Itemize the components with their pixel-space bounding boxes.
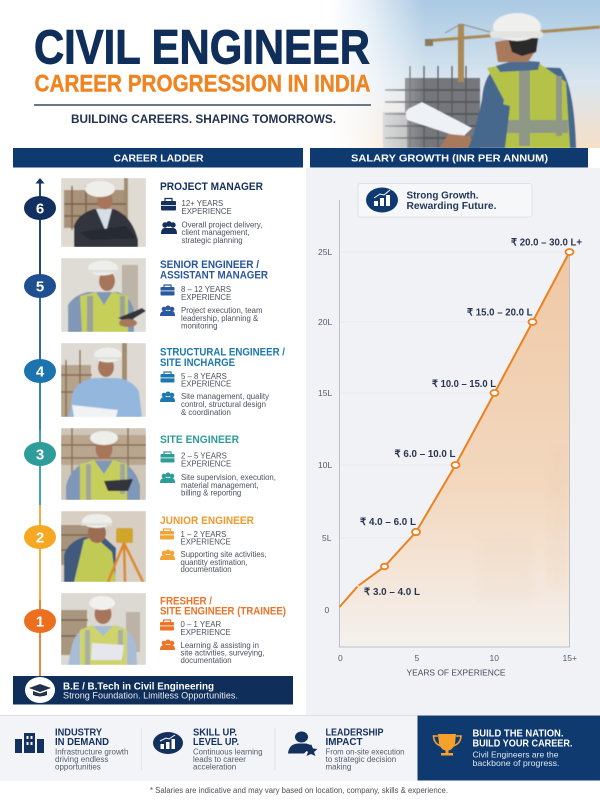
role: structural engineer: STRUCTURAL ENGINEER / xyxy=(160,346,285,358)
benefit: leadership impact: LEADERSHIP xyxy=(326,726,384,738)
role: structural engineer: control, structural design xyxy=(181,400,266,409)
role: project manager: strategic planning xyxy=(182,236,243,245)
heading: career ladder xyxy=(13,148,303,168)
subtitle: CAREER PROGRESSION IN INDIA xyxy=(34,70,370,98)
role: fresher: Learning & assisting in xyxy=(180,641,259,650)
icon: briefcase xyxy=(160,620,174,630)
timeline arrow xyxy=(36,178,44,676)
role: project manager: client management, xyxy=(182,228,250,237)
x axis labels: 5 xyxy=(414,653,420,663)
photo: senior engineer xyxy=(61,258,146,332)
callout: build the nation: backbone of progress. xyxy=(472,758,560,768)
salary labels: ₹ 20.0 – 30.0 L+ xyxy=(511,238,582,248)
step 6 marker: 6 xyxy=(36,200,44,218)
icon: leader with star xyxy=(288,732,318,756)
title: CIVIL ENGINEER xyxy=(34,22,370,74)
heading: salary growth: SALARY GROWTH (INR PER ANNUM) xyxy=(351,152,548,164)
icon: briefcase xyxy=(160,285,174,296)
salary labels: ₹ 3.0 – 4.0 L xyxy=(364,587,420,598)
benefit: leadership impact: to strategic decision xyxy=(326,755,396,764)
benefit: skill up xyxy=(153,726,262,772)
icon: briefcase xyxy=(160,372,174,382)
photo: project manager xyxy=(61,178,146,247)
step 2 marker: 2 xyxy=(36,530,44,546)
callout: build the nation: Civil Engineers are the xyxy=(472,750,559,760)
y axis labels: 5L xyxy=(322,533,332,543)
y axis labels: 0 xyxy=(324,605,330,615)
salary labels xyxy=(360,238,582,598)
x axis labels xyxy=(338,653,577,663)
benefit: skill up: SKILL UP. xyxy=(193,726,237,738)
icon: growth chart xyxy=(366,188,398,212)
heading: salary growth xyxy=(310,148,588,168)
role: fresher: 0 – 1 YEAR xyxy=(180,620,221,629)
benefit: leadership impact: making xyxy=(326,762,351,772)
role: fresher: EXPERIENCE xyxy=(180,628,231,637)
callout: strong growth: Strong Growth. xyxy=(406,190,479,202)
callout: build the nation: BUILD THE NATION. xyxy=(472,728,564,740)
benefit: industry in demand: opportunities xyxy=(55,762,101,772)
role: site engineer: EXPERIENCE xyxy=(181,460,231,468)
role: junior engineer: documentation xyxy=(180,565,232,574)
icon: briefcase xyxy=(161,198,176,210)
y axis labels: 10L xyxy=(318,460,332,470)
benefit: skill up: Continuous learning xyxy=(193,748,262,756)
role: site engineer: Site supervision, execution, xyxy=(181,473,276,482)
role: project manager: EXPERIENCE xyxy=(182,207,232,216)
role: structural engineer: & coordination xyxy=(181,408,231,417)
y axis labels: 25L xyxy=(318,247,332,257)
step 1 marker: 1 xyxy=(36,614,44,630)
benefit: leadership impact: From on-site execution xyxy=(326,748,404,756)
step 1 marker xyxy=(24,609,56,633)
callout: build the nation: BUILD YOUR CAREER. xyxy=(472,738,573,750)
header photo: engineer and construction site xyxy=(330,0,600,148)
role: project manager xyxy=(160,181,263,245)
role: fresher: FRESHER / xyxy=(160,596,212,608)
benefit: skill up: leads to career xyxy=(193,755,246,764)
role: junior engineer: quantity estimation, xyxy=(180,558,248,567)
bottom benefits strip xyxy=(0,715,418,781)
y axis labels xyxy=(318,247,332,615)
role: site engineer: material management, xyxy=(181,481,259,490)
x axis labels: 15+ xyxy=(562,653,577,663)
step 5 marker xyxy=(24,274,56,298)
role: site engineer: 2 – 5 YEARS xyxy=(181,452,227,460)
benefit: industry in demand: IN DEMAND xyxy=(55,736,109,748)
footnote: * Salaries are indicative and may vary based on location, company, skills & experience. xyxy=(150,786,448,795)
role: project manager: 12+ YEARS xyxy=(182,199,223,208)
benefit: industry in demand xyxy=(15,726,128,772)
role: junior engineer: Supporting site activities, xyxy=(180,550,267,559)
callout: build the nation xyxy=(418,716,600,780)
step 4 marker xyxy=(24,359,56,383)
step 3 marker: 3 xyxy=(36,446,44,464)
step 3 marker xyxy=(24,442,56,466)
icon: briefcase xyxy=(160,529,174,540)
title divider xyxy=(34,104,371,106)
step 4 marker: 4 xyxy=(36,364,45,380)
callout: strong growth: Rewarding Future. xyxy=(406,200,497,212)
role: structural engineer: EXPERIENCE xyxy=(181,380,231,388)
salary labels: ₹ 4.0 – 6.0 L xyxy=(360,517,416,528)
photo: site engineer xyxy=(61,428,146,500)
role: senior engineer: EXPERIENCE xyxy=(181,293,231,302)
role: structural engineer xyxy=(160,346,285,417)
step 6 marker xyxy=(24,196,56,220)
role: junior engineer: 1 – 2 YEARS xyxy=(180,530,226,539)
title xyxy=(34,22,370,98)
icon: team xyxy=(160,550,175,560)
benefit: industry in demand: INDUSTRY xyxy=(55,726,102,738)
icon: team xyxy=(160,640,175,650)
icon: trophy xyxy=(434,734,461,756)
icon: buildings xyxy=(15,733,44,753)
icon: team xyxy=(160,472,175,483)
icon: graduation cap xyxy=(25,677,55,703)
icon: team xyxy=(161,221,177,234)
salary growth line chart xyxy=(318,200,582,678)
chart area fill xyxy=(340,252,570,647)
salary labels: ₹ 10.0 – 15.0 L xyxy=(432,379,496,390)
benefit: leadership impact: IMPACT xyxy=(326,736,363,748)
benefit: skill up: acceleration xyxy=(193,762,236,772)
degree banner: Strong Foundation. Limitless Opportunities. xyxy=(63,690,238,702)
x axis title: YEARS OF EXPERIENCE xyxy=(406,668,506,678)
icon: team xyxy=(160,392,175,402)
x axis labels: 0 xyxy=(338,653,343,663)
benefit: skill up: LEVEL UP. xyxy=(193,736,239,748)
callout: strong growth xyxy=(358,184,532,217)
y axis labels: 20L xyxy=(318,317,332,327)
degree banner: B.E / B.Tech in Civil Engineering xyxy=(63,680,214,692)
role: structural engineer: SITE INCHARGE xyxy=(160,357,235,369)
heading: career ladder: CAREER LADDER xyxy=(114,152,204,164)
role: site engineer: billing & reporting xyxy=(181,488,241,498)
tagline: BUILDING CAREERS. SHAPING TOMORROWS. xyxy=(71,114,336,126)
benefit: industry in demand: Infrastructure growth xyxy=(55,748,128,756)
icon: growth chart xyxy=(153,732,183,754)
role: junior engineer xyxy=(160,515,267,574)
role: site engineer: SITE ENGINEER xyxy=(160,434,239,446)
icon: briefcase xyxy=(160,452,174,462)
role: senior engineer: SENIOR ENGINEER / xyxy=(160,259,259,271)
photo: fresher xyxy=(61,593,146,665)
salary labels: ₹ 15.0 – 20.0 L xyxy=(467,308,532,318)
role: fresher: documentation xyxy=(180,656,232,665)
role: senior engineer: ASSISTANT MANAGER xyxy=(160,270,268,282)
benefit: leadership impact xyxy=(288,726,404,772)
role: structural engineer: 5 – 8 YEARS xyxy=(181,372,227,381)
role: junior engineer: JUNIOR ENGINEER xyxy=(160,515,254,527)
x axis labels: 10 xyxy=(490,653,499,663)
role: junior engineer: EXPERIENCE xyxy=(180,538,231,546)
step 2 marker xyxy=(24,525,56,549)
role: senior engineer: monitoring xyxy=(181,322,217,330)
role: fresher xyxy=(160,596,286,665)
step 5 marker: 5 xyxy=(36,278,44,296)
photo: junior engineer xyxy=(61,511,146,582)
chart panel background xyxy=(306,168,600,715)
salary line xyxy=(340,252,570,607)
y axis labels: 15L xyxy=(318,388,332,398)
benefit: industry in demand: driving endless xyxy=(55,755,108,764)
role: fresher: site activities, surveying, xyxy=(180,648,265,658)
degree banner xyxy=(13,676,293,704)
role: fresher: SITE ENGINEER (TRAINEE) xyxy=(160,606,286,618)
icon: team xyxy=(160,306,175,316)
role: senior engineer xyxy=(160,259,268,330)
role: site engineer xyxy=(160,434,276,498)
role: project manager: Overall project delivery, xyxy=(182,220,262,230)
role: structural engineer: Site management, quality xyxy=(181,392,269,401)
salary labels: ₹ 6.0 – 10.0 L xyxy=(394,449,456,460)
role: senior engineer: Project execution, team xyxy=(181,306,262,315)
role: senior engineer: 8 – 12 YEARS xyxy=(181,285,231,294)
role: project manager: PROJECT MANAGER xyxy=(160,181,263,193)
role: senior engineer: leadership, planning & xyxy=(181,314,259,323)
data points xyxy=(381,249,574,569)
photo: structural engineer xyxy=(61,343,146,417)
